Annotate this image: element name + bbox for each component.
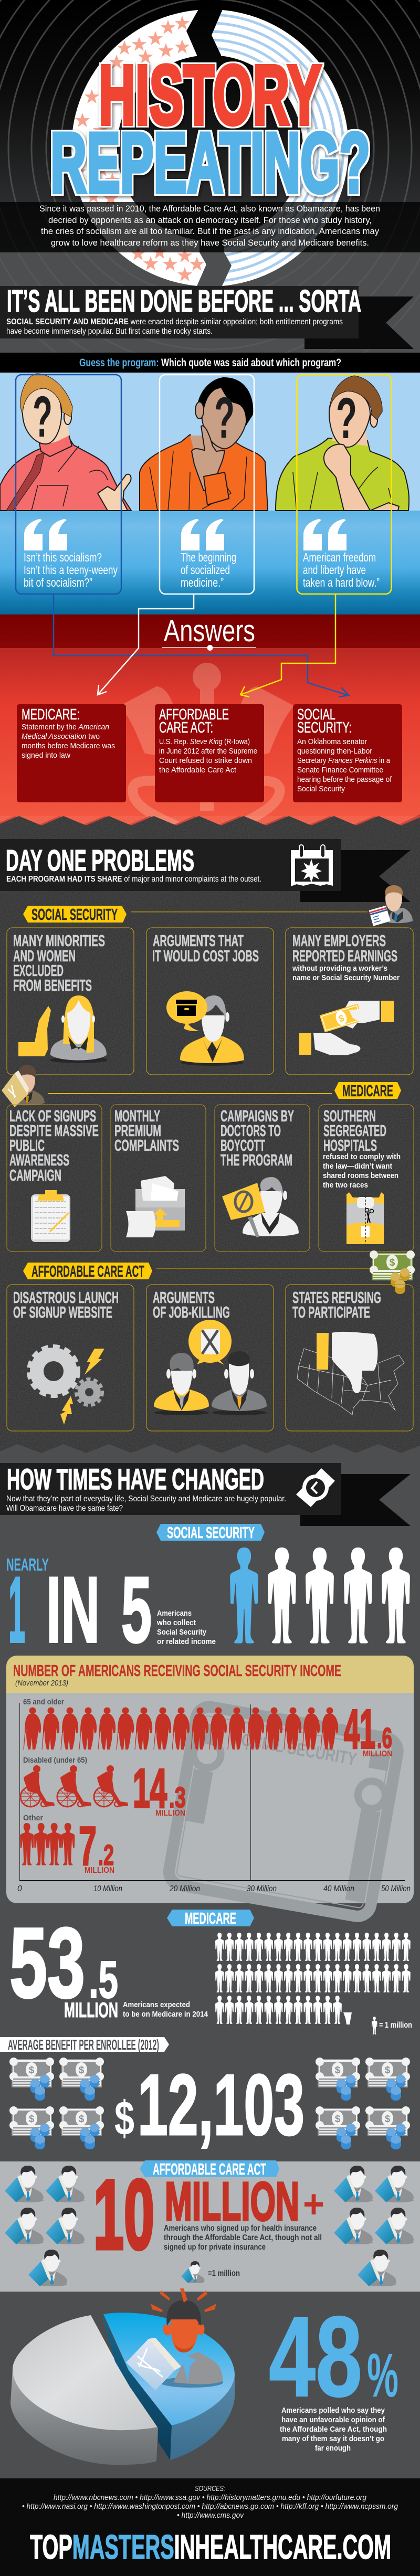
sparks — [151, 2288, 216, 2312]
quote text: The beginning — [181, 550, 236, 564]
heading panel — [0, 286, 359, 338]
answer: affordable care act — [155, 704, 264, 802]
card: segregated hospitals — [319, 1105, 414, 1252]
quote text: Isn’t this a teeny-weeny — [24, 563, 118, 577]
quote text: and liberty have — [303, 563, 366, 577]
question mark: ? — [33, 385, 52, 449]
heading: DAY ONE PROBLEMS — [6, 844, 194, 877]
money icons right — [316, 2058, 410, 2149]
card: segregated hospitals: shared rooms between — [323, 1171, 398, 1180]
arrow: yellow — [240, 594, 335, 697]
icon: gears — [29, 1347, 104, 1425]
text: EXCLUDED — [13, 961, 64, 980]
pie chart — [10, 2288, 235, 2465]
subheading: have become immensely popular. But first came the rocky starts. — [6, 327, 213, 336]
icon: inbox — [126, 1176, 185, 1237]
stat: 1 in 5 — [6, 1555, 216, 1662]
answer: social security: SOCIAL — [297, 706, 335, 723]
text: FROM BENEFITS — [13, 976, 92, 994]
text — [9, 1107, 99, 1184]
quote text — [303, 550, 380, 589]
stat: 10 million — [93, 2159, 324, 2270]
section: guess the program — [0, 353, 420, 614]
arrow: white — [98, 594, 194, 695]
answer: affordable care act: AFFORDABLE — [159, 706, 229, 723]
axis labels: 30 Million — [247, 1884, 277, 1893]
row: disabled — [20, 1756, 186, 1819]
icon: orange head person — [126, 2300, 223, 2390]
row: other: Other — [23, 1814, 43, 1822]
stat: 53.5 million: MILLION — [64, 1999, 118, 2022]
row: disabled: Disabled (under 65) — [23, 1756, 87, 1765]
answer: social security: SECURITY: — [297, 719, 352, 736]
answer: medicare: MEDICARE: — [22, 706, 80, 723]
axis labels: 20 Million — [169, 1884, 200, 1893]
intro text — [39, 204, 380, 248]
text — [152, 931, 259, 965]
legend: 1 million: = 1 million — [379, 2021, 412, 2030]
text — [153, 1288, 230, 1321]
tag: social security: SOCIAL SECURITY — [32, 905, 118, 924]
sources — [22, 2485, 398, 2520]
text — [13, 1288, 119, 1321]
icon: man with card — [369, 885, 413, 926]
money icons right: $ — [385, 2114, 391, 2125]
ring: stars half — [71, 9, 206, 286]
section: day one problems — [0, 814, 420, 1459]
sources: • http://www.nasi.org • http://www.washingtonpost.com • http://abcnews.go.com • http://kff.org • http://www.ncpssm.org — [22, 2503, 398, 2511]
subheading: SOCIAL SECURITY AND MEDICARE were enacted despite similar opposition; both entitlement programs — [6, 317, 343, 326]
answer: affordable care act: CARE ACT: — [159, 719, 213, 736]
text — [114, 1107, 179, 1154]
tag: average benefit — [0, 2037, 169, 2053]
text: BOYCOTT — [220, 1136, 265, 1154]
caduceus watermark — [120, 663, 294, 826]
tag: social security: SOCIAL SECURITY — [167, 1523, 255, 1542]
heading panel — [0, 1463, 341, 1515]
people right — [334, 2166, 414, 2286]
icon: thumbs down — [317, 1332, 378, 1393]
money icons left: $ — [79, 2065, 85, 2076]
card: excluded — [7, 928, 134, 1075]
answer: social security: An Oklahoma senator — [297, 737, 367, 746]
answer: social security: hearing before the passage of — [297, 775, 392, 784]
tag: AFFORDABLE CARE ACT — [153, 2160, 266, 2178]
row: 65 and older: .6 — [377, 1722, 392, 1754]
text: DOCTORS TO — [220, 1121, 281, 1140]
quote mark — [181, 519, 224, 550]
intro text: grow to love healthcare reform as they have Social Security and Medicare benefits. — [51, 238, 369, 248]
subheading: Now that they’re part of everyday life, Social Security and Medicare are hugely popular. — [6, 1494, 286, 1503]
subheading — [6, 317, 343, 336]
icon: man with speech bubble — [166, 991, 244, 1066]
panel: chart — [6, 1656, 414, 1918]
description: Americans polled who say they — [281, 2406, 385, 2415]
section: hero — [0, 0, 420, 353]
quote text: medicine.” — [181, 576, 224, 589]
money icons left: $ — [29, 2065, 35, 2076]
stat: 53.5 million: 53 — [9, 1907, 85, 2019]
description: Americans who signed up for health insurance — [164, 2224, 317, 2233]
ribbon — [300, 1474, 411, 1526]
stat: $12,103 — [114, 2056, 304, 2153]
heading: HOW TIMES HAVE CHANGED — [7, 1462, 264, 1496]
card: reported earnings — [286, 928, 413, 1075]
card: monthly premium — [111, 1105, 206, 1252]
answer: social security: Social Security — [297, 785, 345, 793]
text: ARGUMENTS THAT — [153, 931, 244, 950]
people grid: medicare — [215, 1933, 411, 2024]
quote text: of socialized — [181, 563, 230, 577]
tag: medicare — [334, 1082, 401, 1100]
subheading — [6, 1494, 286, 1513]
icon: man with folder — [2, 1065, 45, 1107]
sources: • http://www.cms.gov — [177, 2511, 244, 2520]
text: ARGUMENTS — [153, 1288, 215, 1307]
description: many of them say it doesn’t go — [282, 2434, 384, 2443]
icon: money exchange — [299, 1001, 394, 1055]
text: AWARENESS — [9, 1151, 69, 1169]
intro text: Since it was passed in 2010, the Affordable Care Act, also known as Obamacare, has been — [39, 204, 380, 214]
answer: affordable care act: the Affordable Care Act — [159, 766, 237, 775]
icon: money — [370, 1250, 415, 1294]
card: segregated hospitals: the law—didn’t want — [323, 1162, 392, 1171]
text: AND WOMEN — [13, 947, 76, 965]
card: reported earnings: name or Social Security Number — [292, 973, 400, 982]
text — [292, 931, 397, 965]
stat: 1 in 5: NEARLY — [6, 1555, 49, 1574]
ribbon — [304, 296, 414, 349]
heading panel — [0, 839, 341, 891]
answer: social security: Senate Finance Committee — [297, 766, 383, 775]
money icons left: $ — [29, 2114, 35, 2125]
stat: 1 in 5: IN — [46, 1557, 100, 1662]
icon: hand and woman — [18, 995, 108, 1063]
axis labels: 10 Million — [93, 1884, 122, 1893]
stat: $12,103: 12,103 — [138, 2056, 304, 2153]
description — [164, 2224, 322, 2252]
money icons left: $ — [79, 2114, 85, 2125]
money icons right: $ — [335, 2114, 341, 2125]
sources: SOURCES: — [195, 2485, 225, 2493]
row: disabled: 14 — [133, 1758, 167, 1819]
card: segregated hospitals: the two races — [323, 1181, 368, 1190]
stat: $12,103: $ — [114, 2092, 134, 2145]
sources: http://www.nbcnews.com • http://www.ssa.gov • http://historymatters.gmu.edu • http://ourfuture.org — [54, 2494, 366, 2502]
tag: medicare: MEDICARE — [185, 1909, 236, 1927]
subheading: Will Obamacare have the same fate? — [6, 1504, 123, 1513]
card: reported earnings: without providing a worker’s — [292, 964, 387, 973]
answer: medicare: Statement by the American — [22, 723, 109, 732]
heading: answers: Answers — [164, 614, 255, 648]
row: 65 and older — [23, 1698, 392, 1760]
text — [220, 1107, 294, 1169]
text: DISASTROUS LAUNCH — [13, 1288, 119, 1307]
axis labels: 40 Million — [323, 1884, 354, 1893]
card: job killing — [146, 1285, 274, 1431]
people left — [5, 2166, 85, 2286]
intro band — [0, 202, 420, 252]
text: MONTHLY — [114, 1107, 160, 1125]
arrow: blue — [54, 594, 349, 697]
panel: chart: (November 2013) — [15, 1679, 68, 1688]
description: have an unfavorable opinion of — [281, 2415, 385, 2424]
section: answers — [0, 594, 420, 829]
money icons right: $ — [335, 2065, 341, 2076]
money icons left — [9, 2058, 104, 2149]
icon: two men and bubble — [154, 1320, 267, 1415]
quote text: American freedom — [303, 550, 376, 564]
text: CAMPAIGNS BY — [220, 1107, 294, 1125]
quote text: taken a hard blow.” — [303, 576, 380, 589]
stat: 1 in 5: Americans — [157, 1609, 192, 1618]
text: LACK OF SIGNUPS — [9, 1107, 96, 1125]
description: through the Affordable Care Act, though not all — [164, 2233, 322, 2242]
row: other: .2 — [98, 1839, 114, 1871]
row: 65 and older: MILLION — [363, 1750, 392, 1758]
divider — [162, 645, 256, 651]
stat: 10 million: MILLION — [165, 2171, 299, 2232]
description: signed up for private insurance — [164, 2243, 266, 2252]
title — [50, 48, 370, 210]
text — [13, 931, 105, 994]
text: DESPITE MASSIVE — [9, 1121, 99, 1140]
stat: 53.5 million: .5 — [89, 1950, 118, 2009]
row: disabled: MILLION — [155, 1809, 185, 1818]
axis labels: 0 — [17, 1884, 22, 1893]
answer: social security — [293, 704, 402, 802]
card: doctors boycott — [215, 1105, 310, 1252]
card: segregated hospitals: refused to comply with — [323, 1152, 401, 1161]
icon: hospital gown — [346, 1192, 384, 1245]
answer: medicare: Medical Association two — [22, 732, 100, 741]
intro text: the cries of socialism are all too familiar. But if the past is any indication, Americans may — [41, 226, 379, 236]
legend — [181, 2261, 240, 2283]
answer: social security: questioning then-Labor — [297, 747, 372, 756]
concentric rings — [0, 0, 420, 404]
icon: clipboard — [31, 1190, 70, 1242]
row: other — [20, 1814, 114, 1877]
text: OF JOB-KILLING — [153, 1303, 230, 1321]
tag: affordable care act — [23, 1262, 152, 1280]
icon: clock — [296, 1468, 335, 1507]
stat: 53.5 million: Americans expected — [123, 2000, 190, 2009]
description: the Affordable Care Act, though — [280, 2425, 387, 2434]
answer: affordable care act: U.S. Rep. Steve King (R-Iowa) — [159, 737, 250, 746]
answer: affordable care act: in June 2012 after the Supreme — [159, 747, 257, 756]
money icons right: $ — [385, 2065, 391, 2076]
card: cost jobs — [146, 928, 274, 1075]
text: THE PROGRAM — [220, 1151, 292, 1169]
stat: 53.5 million: to be on Medicare in 2014 — [123, 2010, 208, 2019]
card: signup website — [7, 1285, 134, 1431]
quote text — [181, 550, 236, 589]
axis labels: 50 Million — [381, 1884, 411, 1893]
stat: 1 in 5: 1 — [8, 1557, 25, 1662]
text: PUBLIC — [9, 1136, 45, 1154]
row: 65 and older: 41 — [344, 1699, 375, 1760]
quote text — [24, 550, 118, 589]
text: HOSPITALS — [323, 1136, 377, 1154]
description: far enough — [315, 2444, 351, 2453]
text: COMPLAINTS — [114, 1136, 179, 1154]
description — [280, 2406, 387, 2453]
icon: US map — [297, 1349, 404, 1415]
answer: medicare: months before Medicare was — [22, 741, 115, 750]
tag: average benefit: AVERAGE BENEFIT PER ENROLLEE (2012) — [8, 2037, 159, 2053]
watermark: social security card: SOCIAL SECURITY — [230, 1728, 359, 1769]
ribbon — [300, 850, 411, 902]
row: 65 and older: 65 and older — [23, 1698, 64, 1706]
icon: doctor with sign — [222, 1177, 299, 1237]
text — [323, 1107, 386, 1154]
text — [292, 1288, 381, 1321]
section: 48 percent — [0, 2288, 420, 2478]
guess heading: Guess the program: Which quote was said about which program? — [79, 357, 341, 369]
text: CAMPAIGN — [9, 1166, 61, 1184]
legend: 1 million — [372, 2017, 412, 2034]
person 1 — [0, 374, 131, 511]
quote mark — [24, 519, 67, 550]
section: footer — [0, 2478, 420, 2576]
subheading: EACH PROGRAM HAD ITS SHARE of major and minor complaints at the outset. — [6, 875, 261, 884]
question mark: ? — [336, 386, 357, 451]
row: other: 7 — [79, 1816, 97, 1877]
quote mark — [303, 519, 346, 550]
quote box: freedom and liberty — [297, 375, 392, 594]
person 3 — [276, 376, 409, 511]
axis labels — [17, 1884, 411, 1893]
quote text: bit of socialism?” — [24, 576, 92, 589]
person 2 — [140, 377, 268, 511]
stat: 1 in 5: or related income — [157, 1637, 216, 1646]
text: IT WOULD COST JOBS — [152, 947, 259, 965]
icon: calendar — [291, 845, 333, 886]
card: states refusing — [286, 1285, 413, 1431]
icon: money: $ — [390, 1257, 395, 1268]
card: lack of signups — [7, 1105, 102, 1252]
text: OF SIGNUP WEBSITE — [13, 1303, 112, 1321]
section: affordable care act stats — [0, 2159, 420, 2292]
stat: 1 in 5: Social Security — [157, 1628, 207, 1637]
tag: social security — [23, 905, 127, 924]
stat: 48%: 48 — [269, 2293, 362, 2421]
stat: 10 million: + — [303, 2182, 324, 2227]
stat: 53.5 million — [9, 1907, 208, 2022]
tag: social security — [156, 1523, 265, 1542]
tag — [140, 2160, 279, 2178]
quote box: socialism — [16, 375, 121, 594]
watermark: social security card — [167, 1704, 400, 1918]
section: how times have changed — [0, 1444, 420, 2165]
axis — [19, 1703, 405, 1881]
intro text: decried by opponents as an attack on democracy itself. For those who study history, — [48, 215, 372, 225]
people: 1 in 5 — [230, 1547, 410, 1644]
question mark: ? — [214, 386, 235, 450]
stat: 10 million: 10 — [93, 2159, 154, 2270]
text: PREMIUM — [114, 1121, 161, 1140]
answer: medicare: signed into law — [22, 751, 70, 760]
text: MANY MINORITIES — [13, 931, 105, 950]
text: SOUTHERN — [323, 1107, 376, 1125]
legend: =1 million — [208, 2269, 240, 2278]
stat: 1 in 5: 5 — [121, 1557, 152, 1662]
row: disabled: .3 — [169, 1781, 186, 1814]
tag: affordable care act: AFFORDABLE CARE ACT — [32, 1262, 144, 1280]
row: other: MILLION — [85, 1866, 114, 1875]
answer: affordable care act: Court refused to strike down — [159, 756, 252, 765]
icon: money exchange: $ — [338, 1013, 345, 1024]
ring: stripes half — [212, 10, 349, 286]
tag: medicare — [167, 1909, 254, 1927]
stat: 1 in 5: who collect — [156, 1618, 196, 1627]
answer: medicare — [17, 704, 126, 802]
answer: social security: Secretary Frances Perkins in a — [297, 756, 391, 765]
quote text: Isn’t this socialism? — [24, 550, 102, 564]
quote box: socialized medicine — [160, 375, 254, 594]
